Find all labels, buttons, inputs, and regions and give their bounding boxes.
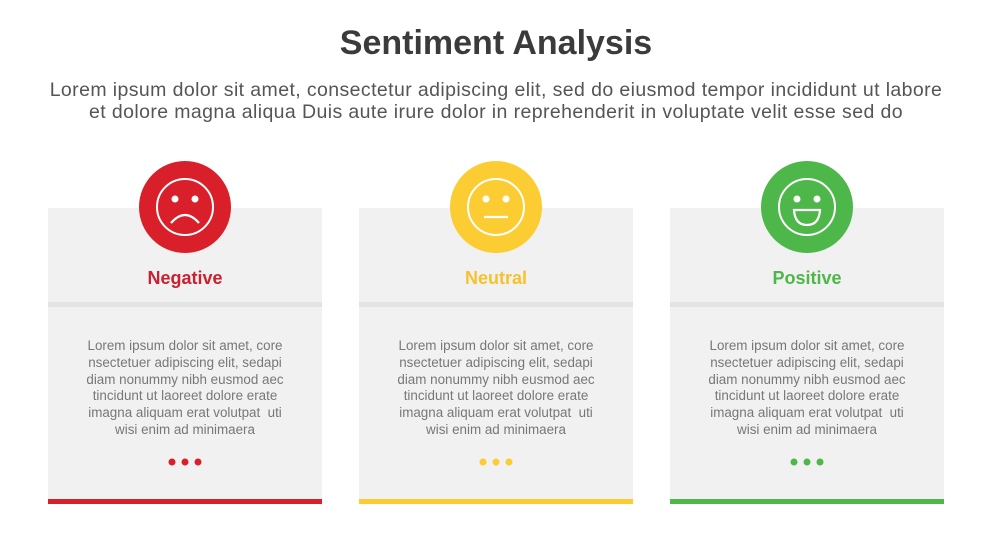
text: wisi enim ad minimaera [737,422,877,437]
text: diam nonummy nibh eusmod aec [708,372,906,387]
panel: negative [48,208,322,504]
dots [168,458,202,466]
label: Positive [772,268,842,288]
text: diam nonummy nibh eusmod aec [86,372,284,387]
text: wisi enim ad minimaera [426,422,566,437]
text [397,338,595,437]
text: Lorem ipsum dolor sit amet, core [710,338,904,353]
text: imagna aliquam erat volutpat uti [88,405,282,420]
dots [480,458,512,466]
label: Neutral [465,268,527,288]
subtitle: Lorem ipsum dolor sit amet, consectetur adipiscing elit, sed do eiusmod tempor incididunt ut labore [50,79,942,101]
text: nsectetuer adipiscing elit, sedapi [710,355,904,370]
icon: happy face [761,161,853,253]
icon: sad face [139,161,231,253]
text: nsectetuer adipiscing elit, sedapi [88,355,282,370]
text: diam nonummy nibh eusmod aec [397,372,595,387]
panel: neutral [359,208,633,504]
panel: positive [670,208,944,504]
text: tincidunt ut laoreet dolore erate [404,388,588,403]
subtitle [50,79,942,123]
subtitle: et dolore magna aliqua Duis aute irure dolor in reprehenderit in voluptate velit esse sed do [89,101,903,123]
text: imagna aliquam erat volutpat uti [710,405,904,420]
label: Negative [147,268,223,288]
text [86,338,284,437]
title: Sentiment Analysis [340,24,652,62]
text [708,338,906,437]
text: nsectetuer adipiscing elit, sedapi [399,355,593,370]
text: tincidunt ut laoreet dolore erate [715,388,899,403]
dots [790,458,824,466]
text: wisi enim ad minimaera [115,422,255,437]
text: tincidunt ut laoreet dolore erate [93,388,277,403]
text: Lorem ipsum dolor sit amet, core [88,338,282,353]
text: imagna aliquam erat volutpat uti [399,405,593,420]
icon: neutral face [450,161,542,253]
text: Lorem ipsum dolor sit amet, core [398,338,593,353]
